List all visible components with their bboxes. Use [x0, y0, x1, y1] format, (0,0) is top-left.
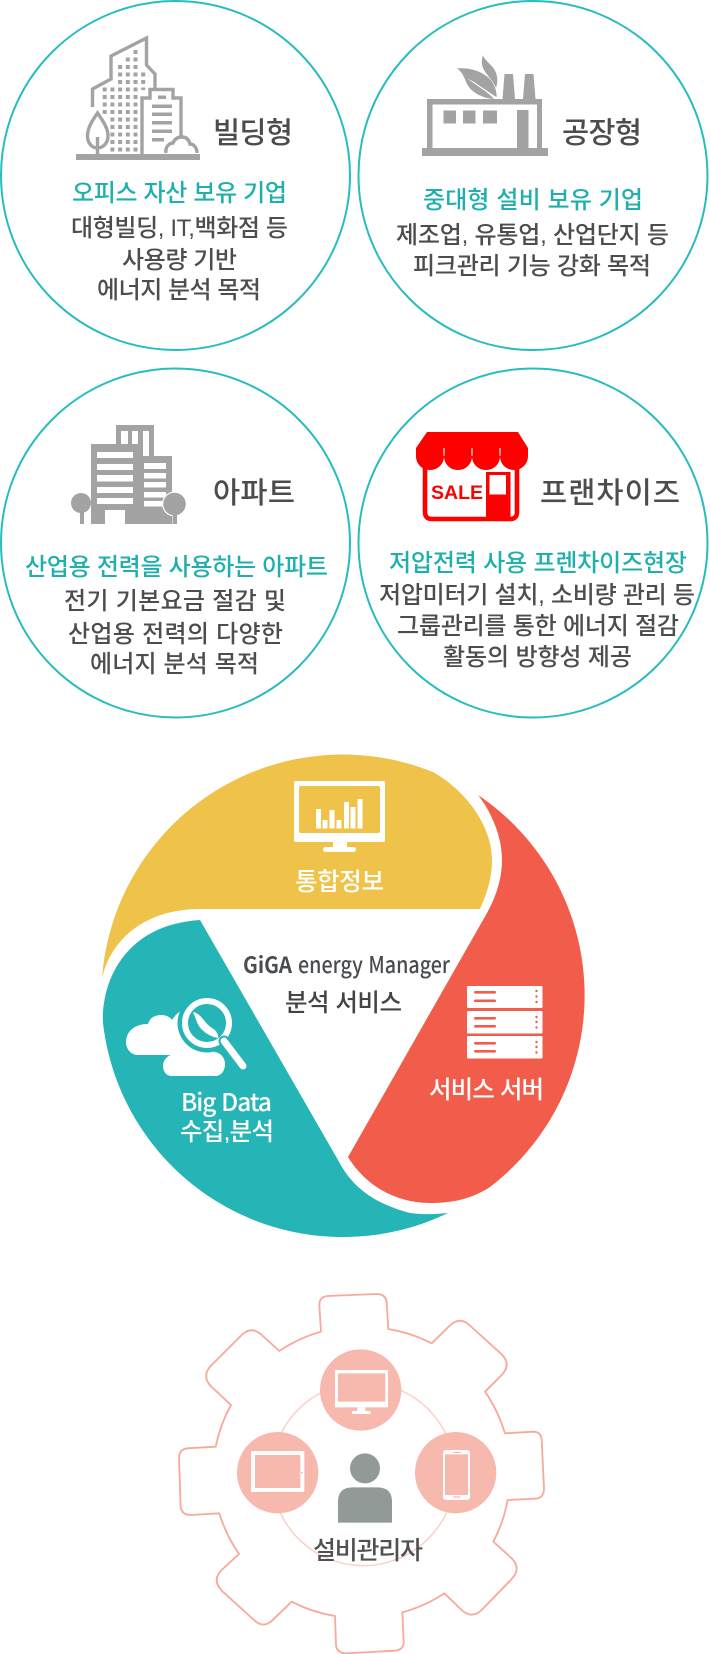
description: franchise type [379, 582, 695, 671]
connecting ring [272, 1382, 455, 1566]
gear outline [179, 1294, 544, 1653]
icon: monitor with bar chart [294, 781, 385, 852]
panel: factory type [358, 1, 708, 350]
icon: clouds with magnifier [126, 994, 243, 1076]
description: apartment type [64, 588, 286, 678]
subheading: office asset: 오피스 자산 보유 기업 [72, 180, 287, 207]
description: franchise type: 활동의 방향성 제공 [443, 644, 632, 671]
heading: franchise type: 프랜차이즈 [540, 477, 680, 510]
center label: GiGA energy Manager analysis service: 분석 서비스 [285, 989, 402, 1017]
icon text: sale: SALE [431, 482, 483, 504]
description: building type: 에너지 분석 목적 [97, 277, 261, 304]
description: building type: 대형빌딩, IT,백화점 등 [71, 215, 288, 242]
heading: factory type: 공장형 [562, 117, 642, 150]
description: apartment type: 산업용 전력의 다양한 [68, 621, 283, 648]
panel: franchise type [358, 368, 708, 718]
label: big data collection and analysis: 수집,분석 [180, 1118, 274, 1146]
subheading: low voltage franchise: 저압전력 사용 프렌차이즈현장 [389, 550, 687, 577]
icon: smartphone [415, 1432, 496, 1513]
icon: factory with leaves [422, 55, 548, 156]
center label: GiGA energy Manager analysis service [243, 946, 451, 1017]
center label: GiGA energy Manager analysis service: GiGA [243, 948, 293, 980]
description: building type [71, 215, 288, 304]
heading: apartment type: 아파트 [213, 477, 295, 510]
icon: person [338, 1453, 392, 1523]
icon: red storefront with sale sign [416, 432, 528, 519]
icon: desktop monitor [320, 1349, 401, 1431]
label: service server: 서비스 서버 [429, 1076, 544, 1104]
label: integrated information: 통합정보 [295, 868, 384, 896]
icon: apartment buildings [71, 425, 187, 524]
heading: building type: 빌딩형 [213, 117, 293, 150]
icon: server rack [467, 986, 542, 1058]
label: big data collection and analysis [180, 1084, 274, 1146]
description: factory type: 피크관리 기능 강화 목적 [413, 253, 651, 280]
label: facility manager: 설비관리자 [313, 1537, 423, 1565]
subheading: large equipment: 중대형 설비 보유 기업 [423, 187, 643, 214]
segment: service server [348, 795, 585, 1203]
segment: big data collection [103, 920, 448, 1237]
icon: office buildings [76, 38, 200, 160]
icon: tablet [237, 1432, 318, 1513]
description: building type: 사용량 기반 [122, 247, 237, 274]
description: apartment type: 전기 기본요금 절감 및 [64, 588, 286, 615]
description: apartment type: 에너지 분석 목적 [90, 651, 259, 678]
chart: three-part analysis cycle [102, 755, 585, 1237]
diagram: facility manager gear [179, 1294, 544, 1653]
description: factory type: 제조업, 유통업, 산업단지 등 [396, 222, 669, 249]
label: big data collection and analysis: Big Data [181, 1084, 272, 1119]
panel: building type [1, 1, 350, 350]
description: factory type [396, 222, 669, 280]
segment: integrated information [102, 755, 492, 978]
panel: apartment type [1, 368, 350, 718]
description: franchise type: 그룹관리를 통한 에너지 절감 [397, 613, 679, 640]
center label: GiGA energy Manager analysis service: energy Manager [298, 946, 451, 980]
subheading: industrial power apartment: 산업용 전력을 사용하는 아파트 [25, 554, 328, 581]
description: franchise type: 저압미터기 설치, 소비량 관리 등 [379, 582, 695, 609]
